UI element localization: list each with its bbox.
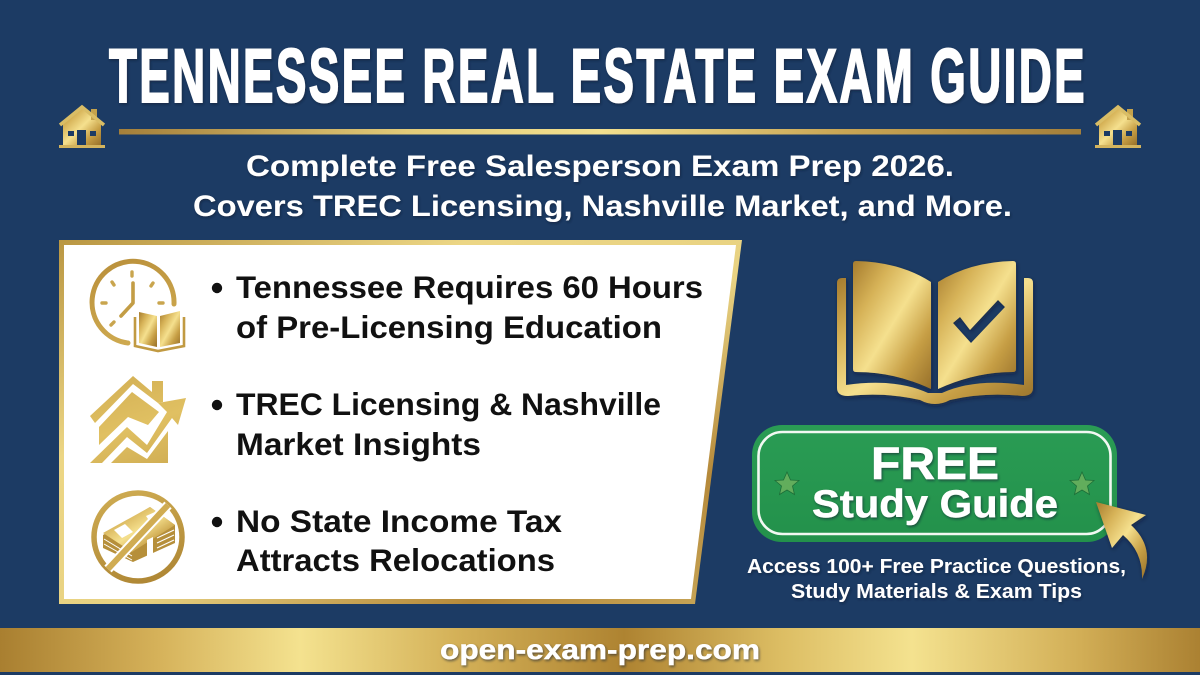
footer band	[0, 628, 1200, 672]
left page	[853, 261, 931, 389]
subtitle: Covers TREC Licensing, Nashville Market, and More.	[193, 190, 1012, 223]
icon: house with rising arrow	[90, 376, 186, 463]
subtitle: Complete Free Salesperson Exam Prep 2026.	[246, 150, 954, 183]
icon: left house	[59, 107, 105, 148]
bullet: pre-licensing hours	[212, 269, 703, 345]
call to action description: Access 100+ Free Practice Questions,	[747, 556, 1126, 578]
call to action description: Study Materials & Exam Tips	[791, 581, 1082, 603]
call to action button	[752, 425, 1117, 542]
bullet: TREC licensing: TREC Licensing & Nashville	[236, 386, 661, 422]
book cover	[837, 278, 1033, 404]
icon: right house	[1095, 107, 1141, 148]
icon: no cash tax	[94, 493, 182, 581]
icon: left star	[775, 472, 799, 494]
panel frame	[59, 240, 742, 604]
gold divider rule	[119, 129, 1081, 134]
button label: Study Guide: Study Guide	[812, 483, 1058, 526]
bullet: no state income tax	[212, 503, 563, 578]
button label: FREE: FREE	[871, 438, 999, 489]
icon: clock and book	[92, 261, 184, 351]
call to action description	[747, 556, 1126, 603]
website address: open-exam-prep.com	[440, 634, 760, 665]
button body	[752, 425, 1117, 542]
button inner outline	[758, 432, 1110, 534]
bullet: TREC licensing	[212, 386, 661, 462]
bullet: pre-licensing hours: of Pre-Licensing Education	[236, 309, 662, 345]
panel: key facts	[59, 240, 742, 604]
icon: right star	[1070, 472, 1094, 494]
arrow pointing at button	[1096, 502, 1147, 579]
right page with check	[938, 261, 1016, 389]
bullet: no state income tax: Attracts Relocations	[236, 542, 555, 578]
bullet: pre-licensing hours: Tennessee Requires 60 Hours	[236, 269, 703, 305]
bullet: no state income tax: No State Income Tax	[236, 503, 563, 539]
icon: open book with checkmark	[837, 261, 1033, 404]
subtitle	[193, 150, 1012, 223]
bullet: TREC licensing: Market Insights	[236, 426, 481, 462]
panel interior	[64, 245, 736, 599]
